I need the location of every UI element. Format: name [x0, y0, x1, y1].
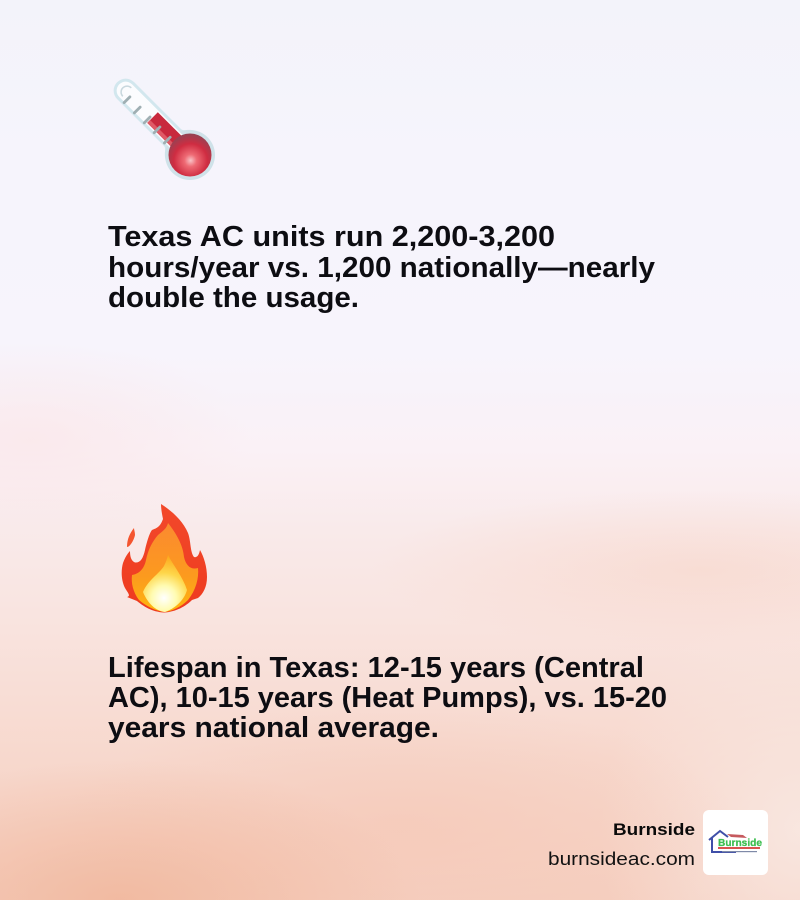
icon: thermometer: [99, 64, 225, 190]
icon: fire: [122, 504, 207, 612]
heading: Texas AC usage text: double the usage.: [108, 282, 359, 314]
logo wordmark: Burnside: [718, 837, 762, 849]
flame core: [143, 555, 187, 612]
heading: Texas AC usage text: Texas AC units run 2,200-3,200: [108, 221, 555, 253]
thermometer mercury: [147, 112, 188, 153]
flame spark: [127, 528, 135, 547]
brand name: Burnside: [613, 820, 695, 839]
thermometer ticks: [122, 95, 172, 145]
heading: Texas lifespan text: AC), 10-15 years (Heat Pumps), vs. 15-20: [108, 682, 667, 714]
flame outer: [122, 504, 207, 612]
logo roof: [727, 834, 747, 838]
logo house outline: [709, 831, 736, 852]
heading: Texas lifespan text: years national average.: [108, 712, 439, 744]
heading: Texas AC usage text: hours/year vs. 1,200 nationally—nearly: [108, 252, 655, 284]
thermometer glass: [103, 68, 194, 159]
website: burnsideac.com: [548, 848, 695, 869]
flame orange: [132, 523, 198, 612]
heading: Texas lifespan text: Lifespan in Texas: 12-15 years (Central: [108, 652, 644, 684]
logo card: [703, 810, 768, 875]
